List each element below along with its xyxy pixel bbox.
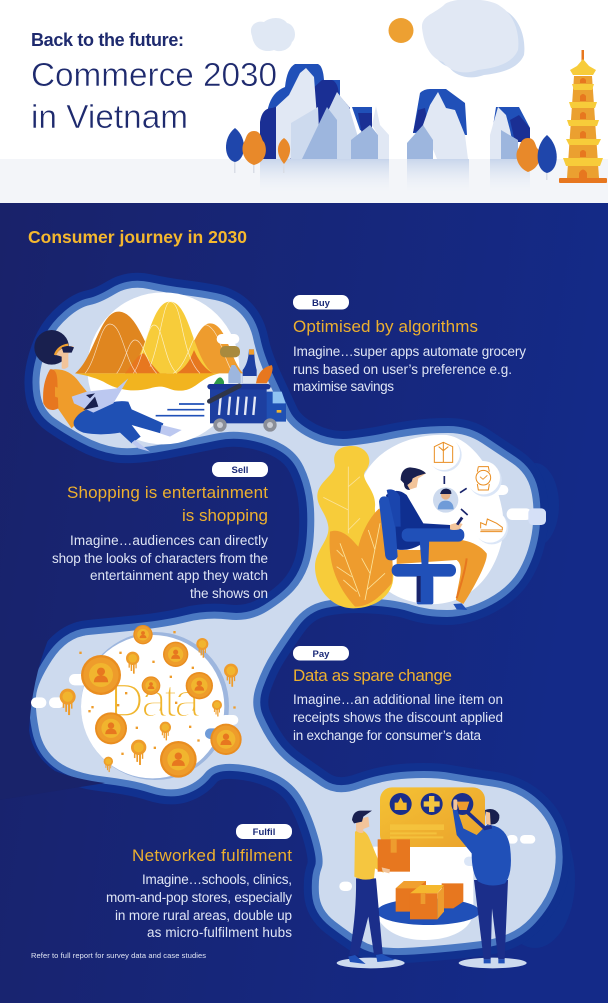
block: fulfil text [106, 824, 292, 940]
flowing journey shape [0, 288, 575, 948]
yellow plant leaf [315, 446, 393, 608]
heading: Sell [67, 483, 268, 525]
pill: Sell [212, 462, 268, 477]
body: Fulfil: in more rural areas, double up [115, 908, 292, 923]
block: buy text [293, 295, 526, 394]
pills behind basket [217, 334, 240, 357]
body: Sell: Imagine…audiences can directly [70, 533, 268, 548]
pill: Sell: Sell [232, 465, 248, 476]
scattered data dots [79, 631, 236, 755]
icon: large mountain [260, 64, 389, 159]
body: Sell: the shows on [190, 586, 268, 601]
icon: avatar with connector dashes [433, 476, 468, 515]
block: sell text [52, 462, 268, 601]
panel: buy illustration [34, 292, 286, 452]
header water band [0, 159, 608, 203]
floating pills [339, 835, 535, 891]
main title line 1: Commerce 2030 [31, 57, 277, 94]
body: Pay [293, 692, 503, 743]
section heading: Consumer journey in 2030 [28, 227, 247, 247]
body: Buy: Imagine…super apps automate grocery [293, 344, 526, 359]
man on chair [379, 467, 487, 610]
header landscape illustration [226, 0, 607, 192]
pill: Pay [293, 646, 349, 660]
white circle backdrop [87, 292, 239, 444]
pill: Buy: Buy [312, 298, 331, 309]
heading: Buy: Optimised by algorithms [293, 317, 478, 336]
heading: Sell: is shopping [182, 506, 268, 525]
icon: large cloud [422, 0, 524, 77]
floating pills [31, 674, 238, 739]
icon: middle mountain [407, 89, 468, 159]
pill: Buy [293, 295, 349, 310]
body: Buy [293, 344, 526, 394]
title block [31, 30, 277, 136]
icon: right mountain [490, 107, 530, 159]
icon: small cloud [251, 18, 295, 51]
icon: shirt bubble [427, 437, 462, 472]
icon: trees right [516, 135, 557, 180]
navy main panel [0, 203, 608, 1003]
chart: overlapping bell curves [75, 302, 243, 391]
heading: Fulfil: Networked fulfilment [132, 846, 292, 865]
body: Fulfil: as micro-fulfilment hubs [147, 925, 292, 940]
footnote: Refer to full report for survey data and case studies [31, 951, 206, 960]
icon: trees left [226, 128, 290, 173]
icon: sun [388, 18, 414, 43]
white circle backdrop [363, 435, 504, 604]
body: Pay: in exchange for consumer’s data [293, 728, 481, 743]
speed lines [156, 404, 204, 416]
body: Fulfil: mom-and-pop stores, especially [106, 890, 292, 905]
stack of boxes [396, 881, 463, 919]
body: Sell: shop the looks of characters from the [52, 551, 268, 566]
body: Sell [52, 533, 268, 601]
white circle backdrop [81, 632, 229, 780]
block: pay text [293, 646, 503, 743]
mountain reflections [260, 159, 530, 192]
body: Pay: Imagine…an additional line item on [293, 692, 503, 707]
app panel with icons [380, 787, 485, 847]
body: Pay: receipts shows the discount applied [293, 710, 503, 725]
man at panel [453, 799, 527, 968]
icon: pagoda [559, 50, 607, 183]
pill: Pay: Pay [313, 649, 330, 660]
pill: Fulfil [236, 824, 292, 839]
speech pills [490, 485, 546, 525]
panel: fulfil illustration [337, 787, 535, 968]
icon: shoe bubble [473, 509, 508, 544]
man with box [337, 811, 410, 968]
dripping coins [60, 638, 238, 772]
white backdrop and platform [373, 847, 480, 940]
coins [81, 625, 242, 778]
person with laptop [34, 330, 182, 452]
body: Fulfil: Imagine…schools, clinics, [142, 872, 292, 887]
heading: Sell: Shopping is entertainment [67, 483, 268, 502]
body: Buy: runs based on user’s preference e.g. [293, 362, 512, 377]
body: Buy: maximise savings [293, 379, 394, 394]
heading: Pay: Data as spare change [293, 666, 452, 685]
data word: Data [110, 674, 201, 727]
body: Sell: entertainment app they watch [90, 568, 268, 583]
panel: pay illustration [31, 625, 242, 780]
icon: watch bubble [467, 461, 502, 497]
body: Fulfil [106, 872, 292, 940]
pill: Fulfil: Fulfil [253, 827, 275, 838]
orange plant leaves [323, 467, 393, 607]
panel: sell illustration [315, 435, 546, 610]
shopping basket truck [207, 349, 286, 432]
title kicker: Back to the future: [31, 30, 184, 50]
main title line 2: in Vietnam [31, 99, 188, 136]
